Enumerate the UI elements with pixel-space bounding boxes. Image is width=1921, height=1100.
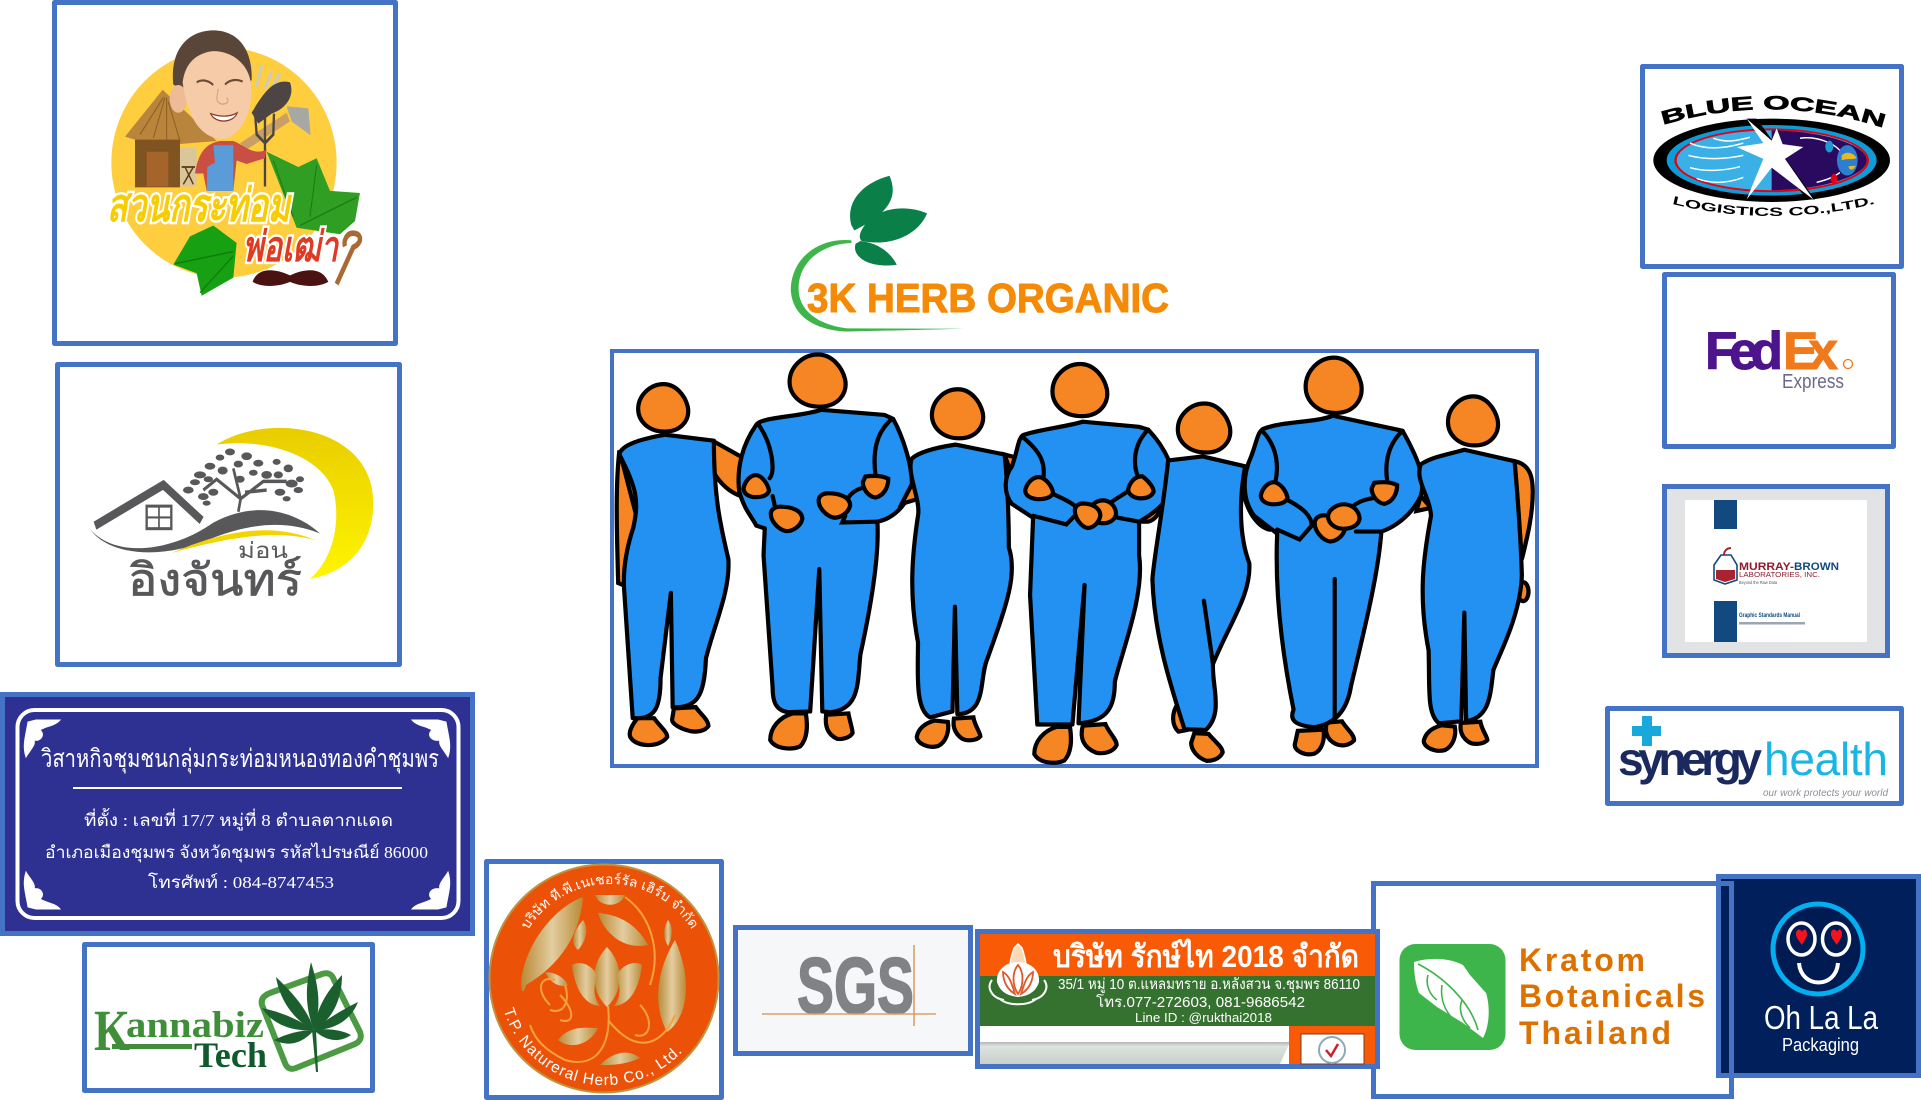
panel: SGS logo: SGS: [797, 941, 914, 1030]
panel: Murray-Brown Laboratories manual cover: BROWN: [1794, 561, 1839, 573]
figure 5: [1152, 404, 1275, 761]
figure 4: [1006, 364, 1174, 763]
panel: FedEx Express logo: Fed: [1705, 322, 1783, 381]
panel: SGS logo: [736, 928, 970, 1054]
panel: Oh La La Packaging logo: Packaging: [1782, 1035, 1859, 1055]
panel: Rukthai 2018 company banner: บริษัท รักษ์ไท 2018 จำกัด: [1053, 938, 1359, 974]
panel: Mon Ing Chan logo: ม่อน: [238, 538, 288, 563]
panel: Blue Ocean Logistics logo: LOGISTICS CO.,LTD.: [1673, 196, 1874, 216]
panel: FedEx Express logo: [1664, 274, 1894, 446]
panel: FedEx Express logo: Express: [1782, 371, 1844, 393]
panel: Kratom Botanicals Thailand logo: Botanicals: [1519, 978, 1705, 1014]
panel: Rukthai 2018 company banner: 35/1 หมู่ 10 ต.แหลมทราย อ.หลังสวน จ.ชุมพร 86110: [1058, 976, 1360, 994]
plaque title: วิสาหกิจชุมชนกลุ่มกระท่อมหนองทองคำชุมพร: [41, 746, 439, 774]
plaque address line 2: อำเภอเมืองชุมพร จังหวัดชุมพร รหัสไปรษณีย์ 86000: [45, 842, 428, 863]
panel: Kratom Botanicals Thailand logo: Kratom: [1519, 942, 1645, 978]
panel: Kratom Botanicals Thailand logo: Thailand: [1519, 1015, 1671, 1051]
panel: Synergy Health logo: our work protects your world: [1763, 788, 1888, 799]
panel: Suan Kratom Pho Thao logo: [54, 2, 396, 344]
panel: Murray-Brown Laboratories manual cover: MURRAY-: [1739, 561, 1794, 573]
panel: community enterprise address plaque: [2, 694, 472, 934]
panel: Synergy Health logo: health: [1764, 733, 1888, 785]
figure 1: [617, 384, 744, 745]
panel: Synergy Health logo: synergy: [1618, 733, 1762, 785]
icon: flask: [1714, 548, 1737, 584]
panel: Murray-Brown Laboratories manual cover: [1664, 486, 1888, 656]
panel: Murray-Brown Laboratories manual cover: Beyond the Raw Data: [1739, 580, 1777, 585]
logo: 3K Herb Organic: [791, 176, 1169, 332]
panel: Rukthai 2018 company banner: Line ID : @rukthai2018: [1135, 1011, 1272, 1025]
logo: 3K Herb Organic: 3K HERB ORGANIC: [807, 275, 1169, 321]
panel: Kannabiz Tech logo: annabiz: [126, 1005, 264, 1046]
figure 6: [1245, 358, 1422, 754]
panel: Rukthai 2018 company banner: [978, 932, 1378, 1066]
plaque phone: โทรศัพท์ : 084-8747453: [148, 872, 334, 892]
panel: FedEx Express logo: Ex: [1783, 322, 1839, 381]
panel: team of blue figures: [612, 351, 1537, 766]
icon: kratom leaf: [1400, 944, 1506, 1050]
panel: Mon Ing Chan logo: [58, 364, 400, 664]
plaque address line 1: ที่ตั้ง : เลขที่ 17/7 หมู่ที่ 8 ตำบลตากแดด: [84, 808, 393, 831]
figure 7: [1416, 396, 1533, 751]
panel: T.P. Natureral Herb logo: บริษัท ที.พี.เนเชอร์รัล เฮิร์บ จำกัด: [522, 872, 696, 929]
figure 3: [902, 389, 1015, 747]
panel: Kannabiz Tech logo: K: [94, 998, 130, 1063]
panel: Kannabiz Tech logo: [84, 944, 372, 1090]
panel: Murray-Brown Laboratories manual cover: LABORATORIES, INC.: [1739, 570, 1820, 579]
panel: Oh La La Packaging logo: Oh La La: [1764, 999, 1879, 1036]
panel: Synergy Health logo: [1608, 708, 1902, 804]
panel: Rukthai 2018 company banner: โทร.077-272603, 081-9686542: [1096, 993, 1305, 1011]
panel: Oh La La Packaging logo: [1718, 876, 1918, 1076]
figure 2: [739, 354, 912, 749]
panel: Mon Ing Chan logo: อิงจันทร์: [128, 556, 302, 605]
panel: Suan Kratom Pho Thao logo: สวนกระท่อม: [107, 179, 293, 231]
panel: Kratom Botanicals Thailand logo: [1374, 884, 1732, 1096]
icon: lotus emblem: [990, 944, 1046, 1004]
panel: Blue Ocean Logistics logo: [1640, 64, 1904, 269]
panel: Blue Ocean Logistics logo: BLUE OCEAN: [1661, 96, 1886, 128]
panel: Kannabiz Tech logo: Tech: [194, 1035, 267, 1075]
panel: Murray-Brown Laboratories manual cover: Graphic Standards Manual: [1739, 613, 1800, 619]
panel: T.P. Natureral Herb logo: T.P. Natureral Herb Co., Ltd.: [504, 1006, 682, 1086]
panel: Suan Kratom Pho Thao logo: พ่อเฒ่า: [243, 223, 340, 270]
panel: T.P. Natureral Herb logo: [484, 859, 724, 1100]
